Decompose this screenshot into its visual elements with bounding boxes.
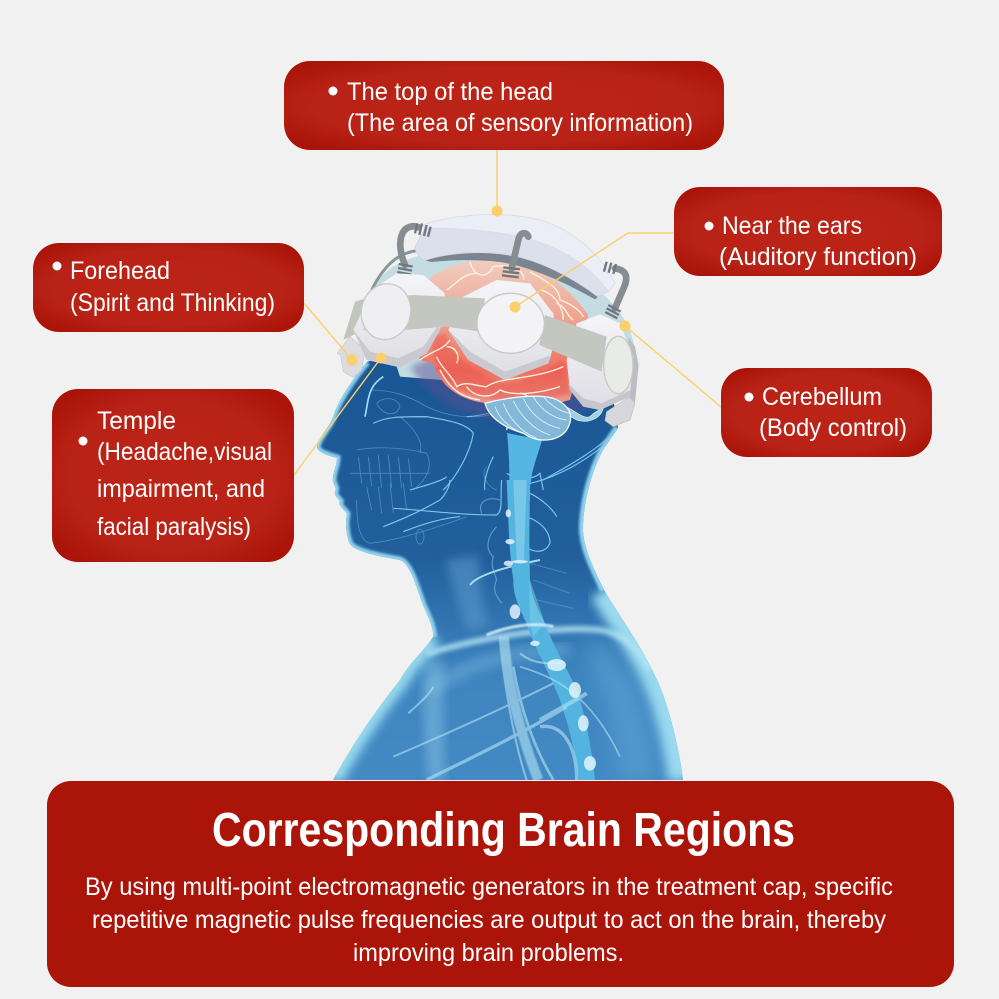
callout: near the ears: Near the ears bbox=[722, 212, 862, 240]
callout: temple: facial paralysis) bbox=[97, 513, 251, 541]
head nerves bbox=[365, 377, 617, 490]
right electrode pad bbox=[567, 314, 633, 410]
callout: temple: impairment, and bbox=[97, 475, 265, 503]
neck centre highlight bbox=[445, 555, 490, 632]
figure: blue anatomical human head and torso bbox=[317, 340, 683, 780]
connector line: forehead bbox=[304, 303, 358, 366]
description text: improving brain problems. bbox=[353, 939, 624, 967]
middle disc bbox=[477, 293, 544, 353]
left electrode pad bbox=[353, 273, 445, 367]
side cable bbox=[372, 251, 417, 290]
callout: temple: Temple bbox=[97, 407, 176, 435]
middle electrode pad bbox=[448, 280, 557, 380]
light bar through shoulder bbox=[487, 625, 553, 635]
heading: Corresponding Brain Regions bbox=[212, 804, 795, 857]
grey strap bbox=[363, 295, 607, 372]
callout: the top of the head: (The area of sensory information) bbox=[347, 109, 693, 137]
cable springs bbox=[397, 223, 621, 318]
right edge piece bbox=[628, 337, 639, 403]
right disc bbox=[604, 336, 633, 394]
connector line: cerebellum bbox=[620, 320, 721, 407]
left strap end bbox=[343, 297, 372, 340]
cerebellum bbox=[485, 396, 571, 440]
treatment cap bbox=[337, 215, 639, 427]
spine discs bbox=[504, 509, 596, 771]
callout: forehead bbox=[33, 243, 304, 332]
callout: near the ears bbox=[674, 187, 942, 276]
description text: repetitive magnetic pulse frequencies are output to act on the brain, thereby bbox=[92, 906, 886, 934]
brain gyri lines bbox=[420, 262, 583, 430]
far left electrode pad bbox=[337, 337, 365, 377]
callout: temple: (Headache,visual bbox=[97, 438, 272, 466]
chest and arm sheen bbox=[423, 660, 445, 780]
shoulder sheen bbox=[427, 629, 650, 670]
panel: corresponding brain regions bbox=[47, 781, 954, 987]
cerebrum bbox=[413, 259, 588, 408]
top band bbox=[415, 215, 615, 299]
spinal column bbox=[393, 480, 620, 780]
face rim light bbox=[317, 362, 433, 637]
description text bbox=[85, 873, 893, 967]
connector line: near the ears bbox=[510, 233, 674, 312]
callout: cerebellum bbox=[721, 368, 932, 457]
brainstem lobe bbox=[563, 407, 603, 421]
left disc bbox=[356, 279, 416, 344]
spinal cord upper bbox=[507, 433, 542, 500]
callout: the top of the head bbox=[284, 61, 724, 150]
purple shadow under brain bbox=[410, 357, 590, 420]
description text: By using multi-point electromagnetic generators in the treatment cap, specific bbox=[85, 873, 893, 901]
back and shoulder rim light bbox=[604, 590, 683, 780]
callout: cerebellum: (Body control) bbox=[759, 414, 907, 442]
spinal nerve bundle bbox=[393, 637, 620, 780]
neck nerves and vertebrae bbox=[383, 477, 573, 608]
skull and jaw lines bbox=[350, 390, 497, 490]
callout: forehead: Forehead bbox=[70, 257, 170, 285]
callout: near the ears: (Auditory function) bbox=[719, 243, 917, 271]
brain bbox=[372, 250, 635, 440]
cranial dome bbox=[372, 250, 635, 390]
connector line: top of the head bbox=[492, 150, 502, 216]
callout: the top of the head: The top of the head bbox=[347, 78, 553, 106]
lower right small pad bbox=[605, 397, 635, 427]
connector cables bbox=[400, 226, 626, 308]
callout: temple bbox=[52, 389, 294, 562]
callout: cerebellum: Cerebellum bbox=[762, 383, 882, 411]
back of head and neck rim light bbox=[583, 428, 618, 590]
connector line: temple bbox=[294, 352, 386, 475]
callout: forehead: (Spirit and Thinking) bbox=[70, 289, 275, 317]
lower jaw lines bbox=[357, 483, 467, 544]
